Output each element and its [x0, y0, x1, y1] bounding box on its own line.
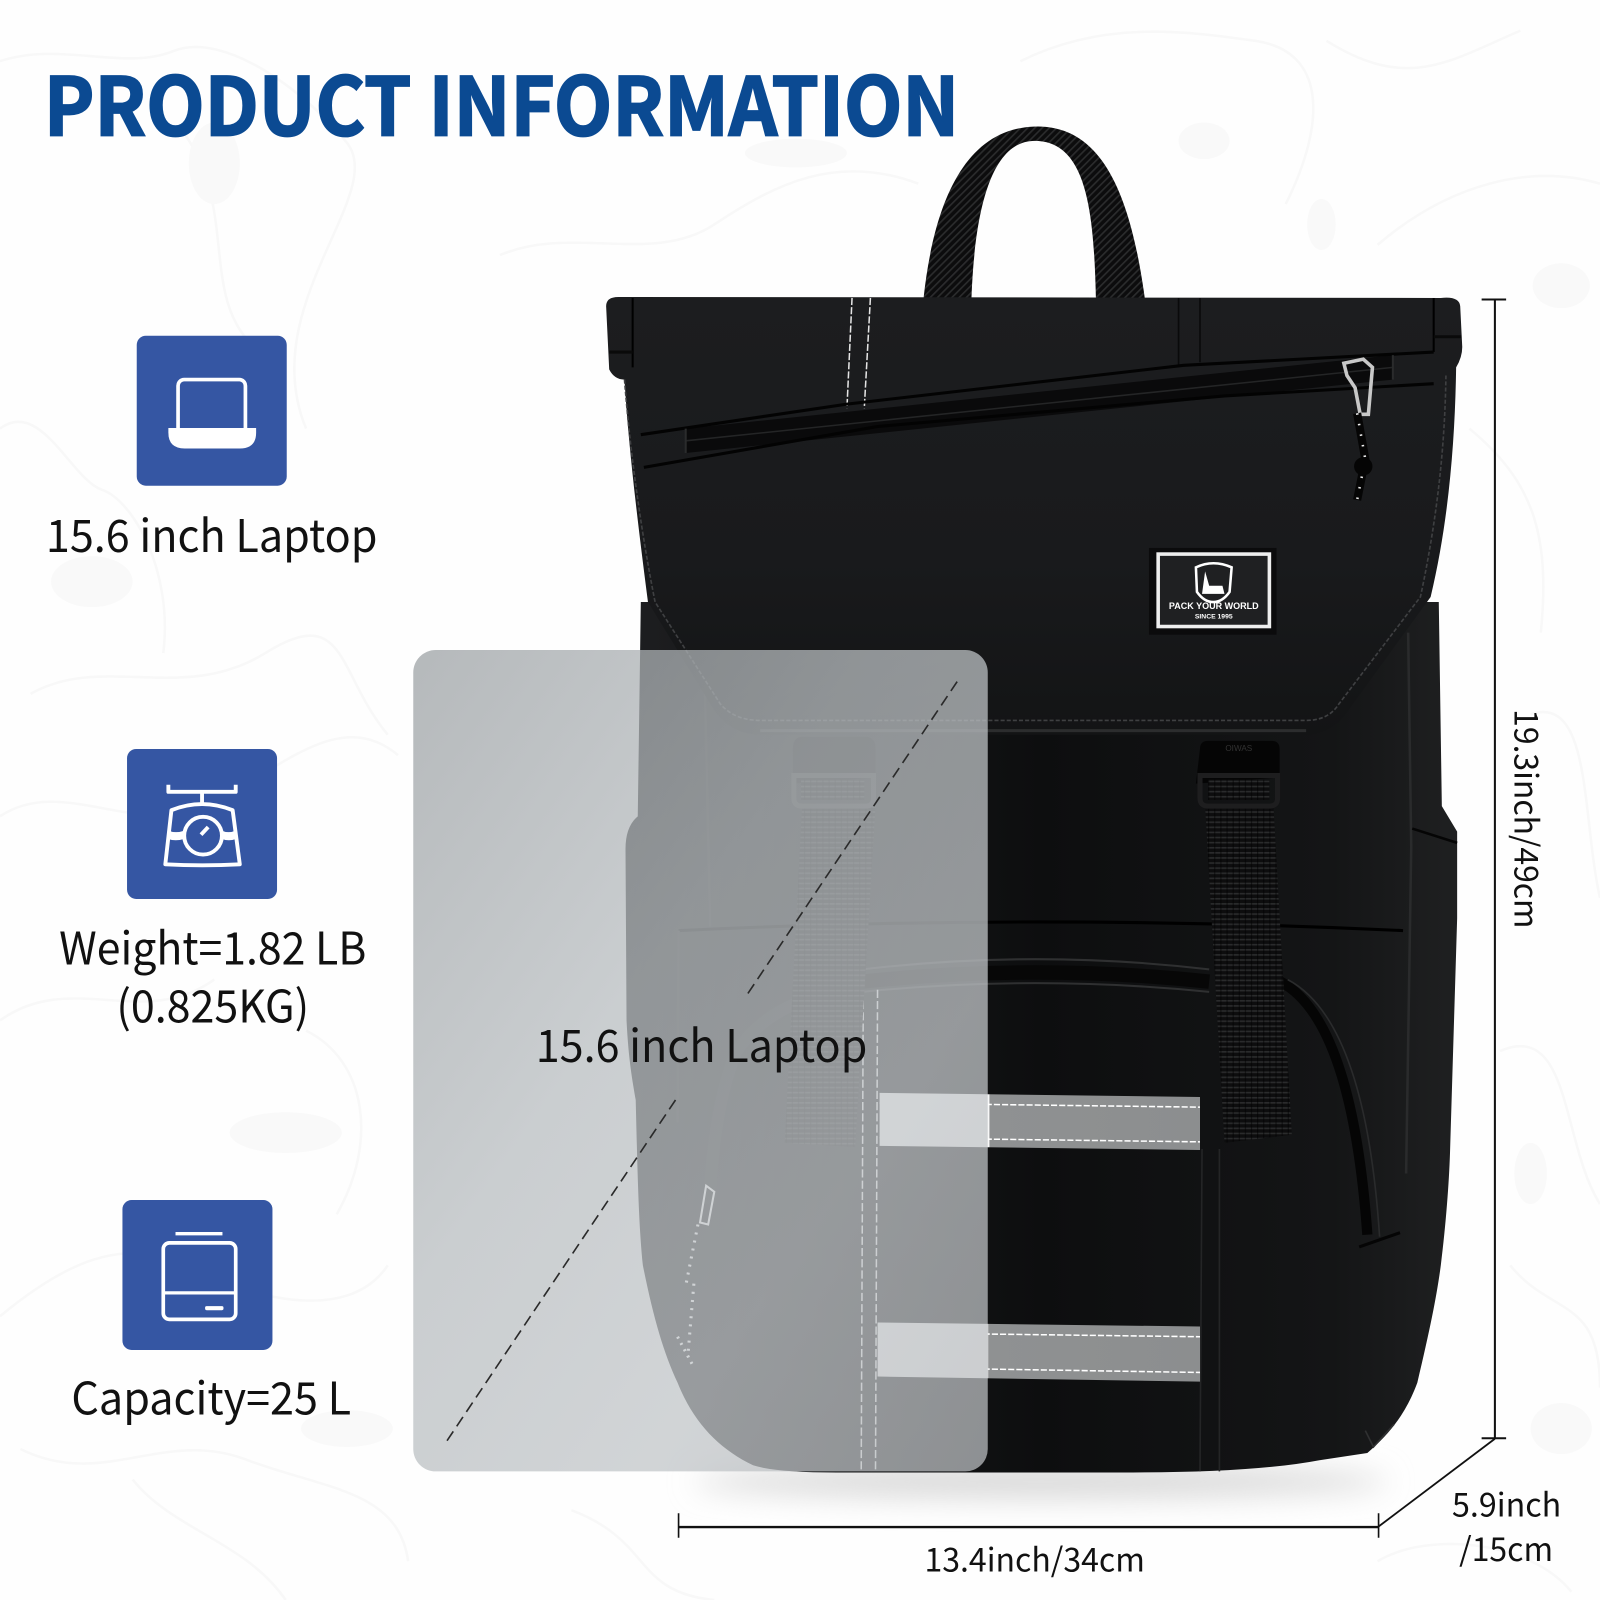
label: capacity value: Capacity=25 L	[71, 1362, 351, 1427]
front strap left	[785, 806, 876, 1147]
dashed diagonal	[445, 682, 957, 1444]
reflective strip upper	[880, 1093, 1200, 1150]
brand badge	[1149, 548, 1277, 635]
backpack body	[626, 602, 1457, 1472]
depth label inch: 5.9inch	[1452, 1479, 1561, 1526]
reflective strip lower	[878, 1322, 1200, 1382]
buckle right: OIWAS	[1225, 744, 1253, 753]
dimension: height	[1482, 299, 1551, 1439]
buckle right	[1196, 741, 1280, 806]
body seams and pockets	[678, 633, 1457, 1471]
label: 15.6 inch laptop: 15.6 inch Laptop	[46, 500, 378, 565]
left side seam stitching	[861, 990, 878, 1469]
width label: 13.4inch/34cm	[924, 1534, 1145, 1581]
left zipper pull ghost	[678, 1186, 714, 1367]
backpack flap	[606, 297, 1462, 735]
label: weight value: Weight=1.82 LB	[59, 912, 366, 977]
feature: laptop size	[46, 336, 378, 565]
laptop overlay panel	[413, 650, 988, 1471]
diagonal zipper pocket	[641, 352, 1434, 467]
zipper pull and cord	[1344, 359, 1372, 500]
backpack handle	[923, 127, 1145, 299]
laptop label: 15.6 inch Laptop	[536, 1010, 867, 1075]
flap seams and stitches	[609, 298, 1461, 731]
dimension: depth	[1379, 1439, 1561, 1571]
label: weight in kg: (0.825KG)	[116, 970, 309, 1035]
height label: 19.3inch/49cm	[1504, 709, 1551, 929]
title: PRODUCT INFORMATION	[44, 43, 959, 160]
backpack illustration	[606, 127, 1462, 1498]
dimension: width	[679, 1513, 1379, 1581]
brand badge: PACK YOUR WORLD	[1169, 601, 1259, 611]
icon: scale	[127, 749, 277, 899]
buckle left	[793, 737, 876, 806]
feature: capacity	[71, 1200, 351, 1427]
brand badge: SINCE 1995	[1195, 613, 1233, 620]
icon: laptop	[137, 336, 287, 486]
ground shadow	[694, 1465, 1388, 1498]
depth label cm: /15cm	[1459, 1524, 1553, 1571]
icon: capacity	[122, 1200, 272, 1350]
front strap right	[1205, 806, 1292, 1143]
feature: weight	[59, 749, 366, 1035]
